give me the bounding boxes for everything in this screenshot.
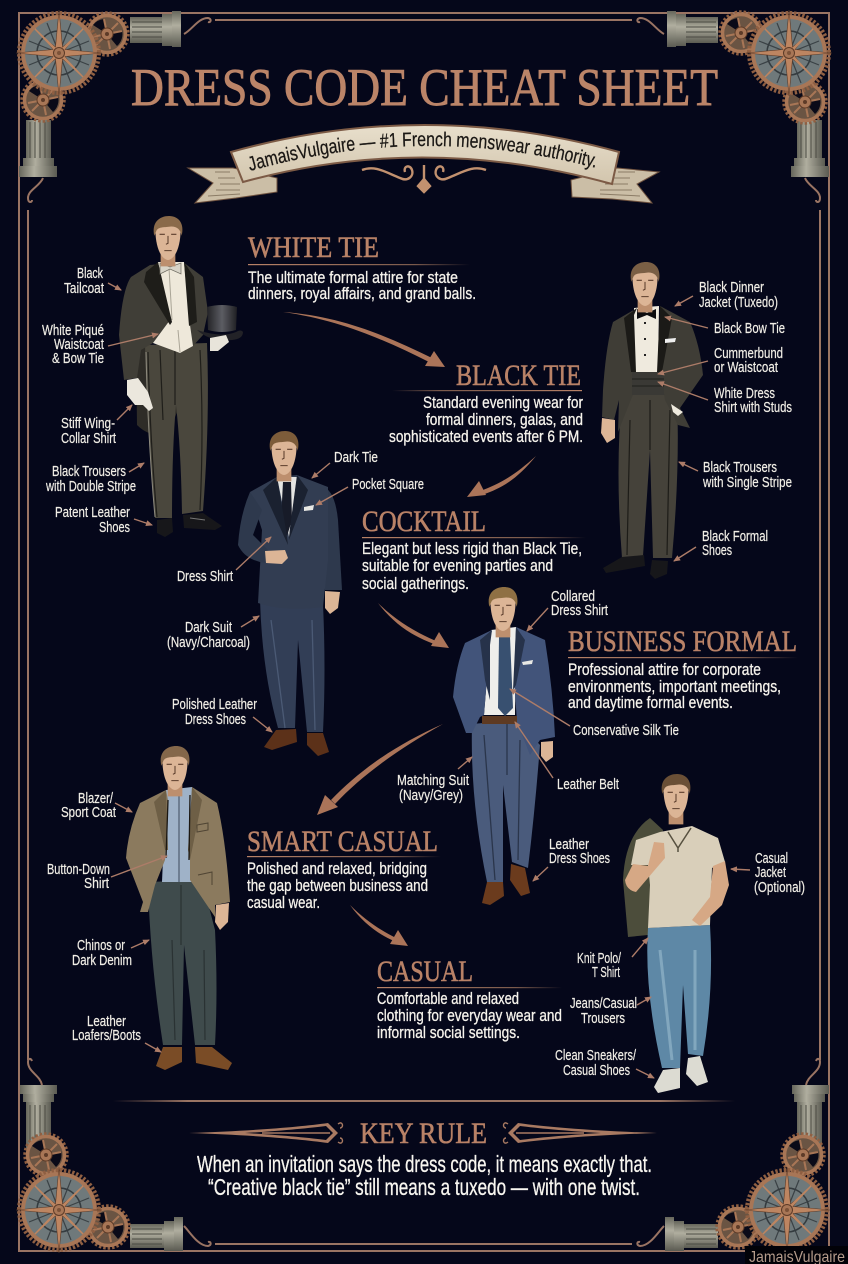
label: bow tie: Black Bow Tie <box>714 321 785 337</box>
label: white pique waistcoat: Waistcoat <box>54 337 104 353</box>
right arm <box>692 861 729 926</box>
description <box>362 539 582 593</box>
waistcoat and shirt <box>153 262 193 353</box>
shirt <box>484 627 516 715</box>
label: dress shirt <box>177 537 271 585</box>
label: black tailcoat: Tailcoat <box>64 281 104 297</box>
label: loafers <box>72 1014 161 1052</box>
belt <box>482 716 517 724</box>
shoes <box>157 518 173 537</box>
label: collared shirt <box>527 589 608 631</box>
flow arrow: business formal to smart casual <box>317 724 443 815</box>
jeans <box>647 925 711 1068</box>
label: cummerbund: Cummerbund <box>714 346 783 362</box>
columns: bottom left <box>20 1059 211 1251</box>
figure: cocktail <box>238 431 342 756</box>
labels: business formal <box>397 589 679 881</box>
label: dress shirt: Shirt with Studs <box>714 400 792 416</box>
label: dress shoes: Dress Shoes <box>549 851 610 867</box>
description: and daytime formal events. <box>568 693 733 712</box>
trousers <box>145 343 208 518</box>
description: dinners, royal affairs, and grand balls. <box>248 284 476 303</box>
description: sophisticated events after 6 PM. <box>389 427 583 446</box>
gloves <box>210 335 229 351</box>
section: cocktail <box>362 505 586 593</box>
bow tie <box>637 309 656 319</box>
label: sneakers <box>555 1048 654 1079</box>
lapels <box>263 475 308 545</box>
label: dark suit: (Navy/Charcoal) <box>167 635 250 651</box>
tie <box>281 482 292 536</box>
label: button-down shirt: Shirt <box>84 876 109 892</box>
label: wing-collar shirt: Collar Shirt <box>61 431 116 447</box>
shoes <box>603 555 645 573</box>
section: casual <box>377 955 562 1042</box>
divider <box>113 1100 735 1102</box>
ribbon tail left <box>188 168 277 203</box>
head <box>154 216 182 266</box>
lapels <box>624 306 672 372</box>
hand <box>541 741 553 762</box>
jacket <box>250 475 328 609</box>
label: jeans: Jeans/Casual <box>570 996 637 1012</box>
label: double stripe trousers <box>45 463 144 495</box>
label: bow tie <box>665 317 785 337</box>
label: white pique waistcoat: & Bow Tie <box>52 351 104 367</box>
flourish under ribbon <box>362 165 486 192</box>
figure: black tie <box>601 262 703 579</box>
label: patent shoes <box>55 505 152 536</box>
label: collared shirt: Dress Shirt <box>551 603 608 619</box>
label: formal shoes <box>674 529 768 561</box>
label: collared shirt: Collared <box>551 589 595 605</box>
label: casual jacket: (Optional) <box>754 880 805 896</box>
trousers <box>260 600 324 732</box>
tie <box>498 637 513 716</box>
label: dinner jacket <box>675 280 778 311</box>
section: smart casual <box>247 825 441 912</box>
figure: casual <box>623 774 729 1093</box>
ribbon main band <box>231 125 619 184</box>
pocket square <box>522 660 533 665</box>
right arm <box>318 486 342 590</box>
draped jacket <box>623 818 663 937</box>
label: polished shoes: Polished Leather <box>172 697 257 713</box>
label: dark tie <box>312 450 378 478</box>
body text <box>197 1151 652 1200</box>
description: Elegant but less rigid than Black Tie, <box>362 539 582 558</box>
label: chinos <box>72 938 149 969</box>
label: leather belt: Leather Belt <box>557 777 619 793</box>
label: casual jacket <box>731 851 805 896</box>
description: social gatherings. <box>362 574 469 593</box>
label: dress shoes <box>533 837 610 881</box>
label: white pique waistcoat <box>42 323 158 367</box>
ribbon tail right <box>571 168 659 203</box>
flow arrow: cocktail to business formal <box>378 603 449 648</box>
labels: black tie <box>658 280 792 561</box>
left arm <box>238 492 268 563</box>
label: wing-collar shirt <box>61 405 132 447</box>
section: business formal <box>568 625 798 712</box>
label: wing-collar shirt: Stiff Wing- <box>61 416 115 432</box>
label: formal shoes: Black Formal <box>702 529 768 545</box>
columns: top right <box>637 11 829 202</box>
shirt <box>277 477 297 537</box>
figure: white tie <box>119 216 243 537</box>
label: single stripe trousers: Black Trousers <box>703 460 777 476</box>
label: dinner jacket: Jacket (Tuxedo) <box>699 295 778 311</box>
description: environments, important meetings, <box>568 677 781 696</box>
shoes <box>156 1047 182 1070</box>
description <box>248 268 476 303</box>
description: casual wear. <box>247 893 320 912</box>
hands <box>601 418 615 443</box>
description: The ultimate formal attire for state <box>248 268 458 287</box>
heading: CASUAL <box>377 955 473 988</box>
head <box>662 774 690 824</box>
jacket pockets <box>197 823 212 885</box>
label: matching suit <box>397 757 472 804</box>
description: formal dinners, galas, and <box>426 410 583 429</box>
body text: When an invitation says the dress code, it means exactly that. <box>197 1151 652 1177</box>
description <box>568 660 781 712</box>
lapels <box>154 787 202 860</box>
label: pocket square <box>316 477 424 505</box>
ribbon banner <box>186 124 660 204</box>
label: silk tie: Conservative Silk Tie <box>573 723 679 739</box>
head <box>161 746 189 796</box>
lapels <box>144 262 197 326</box>
heading: BLACK TIE <box>456 359 581 392</box>
trousers <box>472 720 540 882</box>
head <box>631 262 659 312</box>
label: knit polo: T Shirt <box>592 965 620 981</box>
label: white pique waistcoat: White Piqué <box>42 323 104 339</box>
labels: casual <box>555 851 805 1079</box>
label: patent shoes: Shoes <box>99 520 130 536</box>
tails <box>136 345 200 435</box>
gears: bottom right <box>718 1134 830 1253</box>
shirt <box>162 787 193 882</box>
description <box>247 859 428 912</box>
description: informal social settings. <box>377 1023 520 1042</box>
label: button-down shirt: Button-Down <box>47 862 110 878</box>
cummerbund <box>632 372 664 395</box>
key rule section <box>113 1100 735 1200</box>
ribbon banner: JamaisVulgaire — #1 French menswear authority. <box>249 132 596 170</box>
label: blazer: Blazer/ <box>78 791 114 807</box>
hand <box>215 903 229 930</box>
description <box>377 989 562 1042</box>
description: Polished and relaxed, bridging <box>247 859 427 878</box>
description: suitable for evening parties and <box>362 556 553 575</box>
label: knit polo: Knit Polo/ <box>577 951 622 967</box>
coat <box>119 262 208 380</box>
trousers <box>148 880 216 1045</box>
label: button-down shirt <box>47 856 167 892</box>
heading: BUSINESS FORMAL <box>568 625 797 658</box>
flow arrow: white tie to black tie <box>283 312 445 367</box>
label: black tailcoat <box>64 266 121 297</box>
bow tie <box>160 263 181 274</box>
label: single stripe trousers <box>679 460 792 491</box>
label: cummerbund: or Waistcoat <box>714 360 778 376</box>
label: dress shirt: Dress Shirt <box>177 569 233 585</box>
ribbon text <box>250 146 600 171</box>
label: black tailcoat: Black <box>77 266 104 282</box>
gears: top left <box>16 10 128 120</box>
ornament right <box>504 1123 657 1143</box>
top hat <box>207 305 237 332</box>
label: polished shoes <box>172 697 272 732</box>
polo <box>631 826 725 928</box>
hands <box>265 550 288 564</box>
sneakers <box>654 1068 680 1093</box>
label: pocket square: Pocket Square <box>352 477 424 493</box>
head <box>270 431 298 481</box>
head <box>489 587 517 637</box>
description: Standard evening wear for <box>423 393 583 412</box>
trousers <box>618 395 678 558</box>
heading: KEY RULE <box>360 1117 487 1150</box>
label: loafers: Leather <box>87 1014 126 1030</box>
label: jeans: Trousers <box>581 1011 625 1027</box>
label: dress shirt: White Dress <box>714 386 775 402</box>
columns: bottom right <box>637 1059 829 1251</box>
shirt studs <box>644 322 646 356</box>
label: patent shoes: Patent Leather <box>55 505 130 521</box>
figure: smart casual <box>126 746 232 1070</box>
label: dinner jacket: Black Dinner <box>699 280 764 296</box>
label: chinos: Chinos or <box>77 938 125 954</box>
label: blazer: Sport Coat <box>61 805 116 821</box>
label: double stripe trousers: with Double Stripe <box>45 479 136 495</box>
label: cummerbund <box>658 346 783 376</box>
label: double stripe trousers: Black Trousers <box>52 464 126 480</box>
label: sneakers: Clean Sneakers/ <box>555 1048 637 1064</box>
description: clothing for everyday wear and <box>377 1006 562 1025</box>
label: single stripe trousers: with Single Stripe <box>702 475 792 491</box>
lapels <box>480 627 525 700</box>
section: black tie <box>389 359 583 446</box>
description: Comfortable and relaxed <box>377 989 519 1008</box>
label: polished shoes: Dress Shoes <box>185 712 246 728</box>
label: jeans <box>570 996 651 1027</box>
jacket <box>126 787 230 917</box>
heading: COCKTAIL <box>362 505 486 538</box>
figure: business formal <box>453 587 555 905</box>
title: DRESS CODE CHEAT SHEET <box>131 59 718 117</box>
flow arrow: black tie to cocktail <box>467 456 536 497</box>
shirt <box>634 306 659 372</box>
ornament left <box>189 1123 342 1143</box>
jacket <box>602 306 703 432</box>
label: dress shirt <box>658 382 792 416</box>
label: chinos: Dark Denim <box>72 953 132 969</box>
label: blazer <box>61 791 132 821</box>
label: dress shoes: Leather <box>549 837 589 853</box>
jacket <box>453 627 555 755</box>
shoes <box>482 882 504 905</box>
label: dark suit: Dark Suit <box>185 620 232 636</box>
pocket square <box>665 338 676 343</box>
labels: white tie <box>42 266 158 536</box>
body text: “Creative black tie” still means a tuxedo — with one twist. <box>208 1174 640 1200</box>
description: the gap between business and <box>247 876 428 895</box>
label: dark suit <box>167 616 259 651</box>
labels: smart casual <box>47 791 167 1052</box>
label: leather belt <box>515 722 619 793</box>
heading: SMART CASUAL <box>247 825 438 858</box>
label: casual jacket: Casual <box>755 851 788 867</box>
section: white tie <box>248 231 476 303</box>
labels: cocktail <box>167 450 424 732</box>
label: loafers: Loafers/Boots <box>72 1028 141 1044</box>
description <box>389 393 583 446</box>
description: Professional attire for corporate <box>568 660 761 679</box>
label: matching suit: (Navy/Grey) <box>399 788 463 804</box>
label: dark tie: Dark Tie <box>334 450 378 466</box>
left arm <box>625 842 665 892</box>
columns: top left <box>19 11 211 202</box>
label: sneakers: Casual Shoes <box>563 1063 630 1079</box>
label: matching suit: Matching Suit <box>397 773 469 789</box>
label: formal shoes: Shoes <box>702 543 732 559</box>
label: silk tie <box>510 689 679 739</box>
pocket square <box>304 505 314 511</box>
label: casual jacket: Jacket <box>755 865 786 881</box>
flow arrow: smart casual to casual <box>350 905 408 946</box>
heading: WHITE TIE <box>248 231 379 264</box>
label: knit polo <box>577 938 648 981</box>
shoes <box>264 729 297 750</box>
gears: bottom left <box>16 1134 128 1253</box>
gears: top right <box>720 10 832 122</box>
